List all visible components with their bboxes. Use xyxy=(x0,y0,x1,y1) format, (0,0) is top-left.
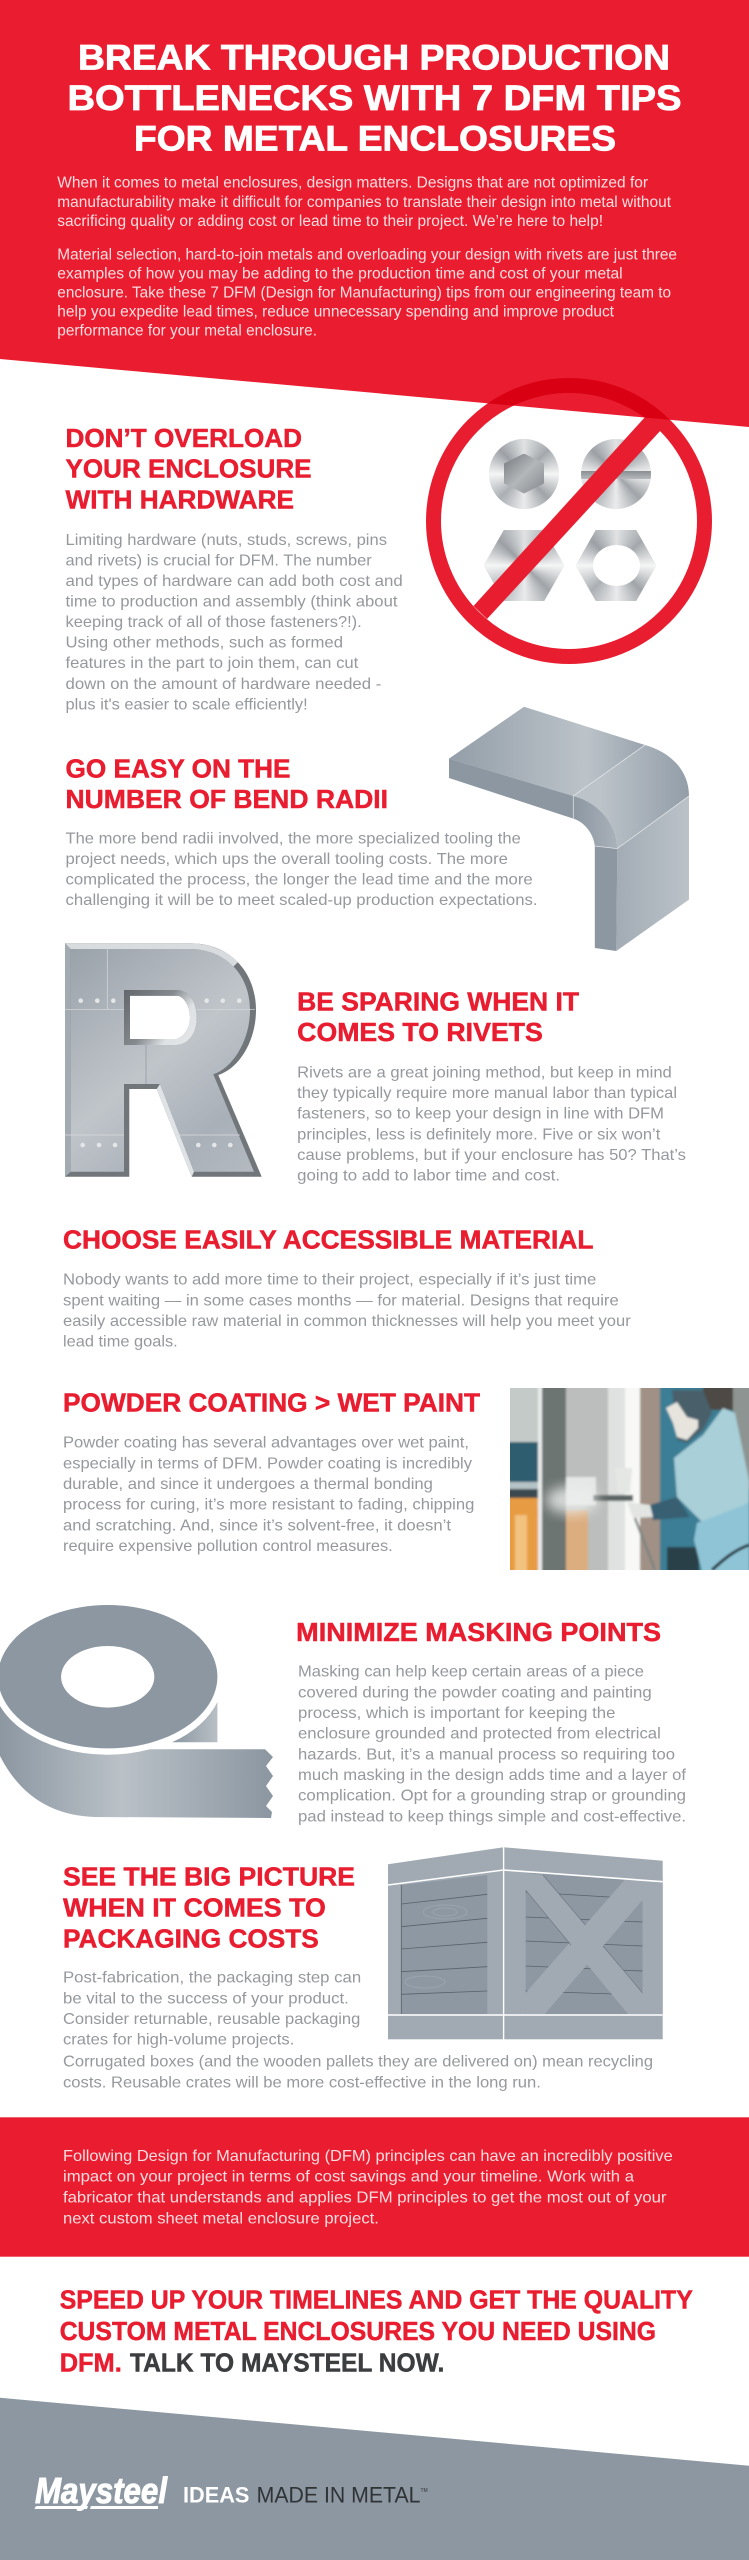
icon: bent sheet metal xyxy=(449,707,689,951)
title xyxy=(68,38,682,158)
heading: don't overload: WITH HARDWARE xyxy=(66,485,294,515)
icon: red no sign xyxy=(434,386,704,656)
heading: packaging: WHEN IT COMES TO xyxy=(63,1892,326,1922)
panel: tip 3 rivets xyxy=(65,943,686,1185)
body text: hardware: down on the amount of hardware needed - xyxy=(66,676,381,693)
intro paragraph 2: help you expedite lead times, reduce unnecessary spending and improve product xyxy=(57,304,615,321)
body text: material: Nobody wants to add more time to their project, especially if it’s just time xyxy=(63,1272,596,1289)
body text: powder coating: process for curing, it’s more resistant to fading, chipping xyxy=(63,1497,474,1514)
body text: packaging beside crate: crates for high-volume projects. xyxy=(63,2032,294,2049)
heading: rivets: COMES TO RIVETS xyxy=(297,1017,543,1047)
call to action: SPEED UP YOUR TIMELINES AND GET THE QUALITY xyxy=(60,2284,693,2314)
body text: bend radii xyxy=(66,831,538,909)
intro paragraph 2: enclosure. Take these 7 DFM (Design for Manufacturing) tips from our engineering team to xyxy=(57,285,671,302)
body text: powder coating: durable, and since it undergoes a thermal bonding xyxy=(63,1476,433,1493)
icon: prohibited hardware xyxy=(434,386,704,656)
body text: rivets: going to add to labor time and cost. xyxy=(297,1168,560,1185)
icon: hex nut xyxy=(576,530,656,601)
panel: tip 7 packaging xyxy=(63,1847,663,2091)
tagline xyxy=(183,2483,428,2508)
logo: Maysteel: Maysteel xyxy=(35,2470,168,2511)
body text: powder coating: Powder coating has several advantages over wet paint, xyxy=(63,1435,469,1452)
icon: metal letter R xyxy=(65,943,262,1177)
body text: masking: pad instead to keep things simple and cost-effective. xyxy=(298,1808,686,1825)
heading: bend radii: NUMBER OF BEND RADII xyxy=(66,784,388,814)
summary text xyxy=(63,2148,673,2227)
photo: worker powder coating xyxy=(510,1388,749,1570)
body text: bend radii: complicated the process, the longer the lead time and the more xyxy=(66,872,533,889)
panel: tip 5 powder coating xyxy=(63,1380,749,1580)
body text: powder coating: especially in terms of DFM. Powder coating is incredibly xyxy=(63,1455,472,1472)
call to action xyxy=(60,2284,693,2378)
body text: packaging beside crate: Consider returnable, reusable packaging xyxy=(63,2011,360,2028)
body text: material: lead time goals. xyxy=(63,1334,178,1351)
heading: masking: MINIMIZE MASKING POINTS xyxy=(296,1617,661,1647)
call to action: TALK TO MAYSTEEL NOW. xyxy=(130,2348,444,2378)
body text: packaging below crate: Corrugated boxes (and the wooden pallets they are delivered on) mean recycling xyxy=(63,2054,653,2071)
body text: packaging beside crate xyxy=(63,1970,361,2049)
body text: bend radii: challenging it will be to meet scaled-up production expectations. xyxy=(66,892,538,909)
heading: packaging: SEE THE BIG PICTURE xyxy=(63,1862,355,1892)
body text: rivets: Rivets are a great joining method, but keep in mind xyxy=(297,1064,672,1081)
body text: hardware: and rivets) is crucial for DFM. The number xyxy=(66,552,372,570)
panel: tip 6 masking xyxy=(0,1605,687,1825)
body text: material xyxy=(63,1272,631,1351)
summary text: fabricator that understands and applies DFM principles to get the most out of your xyxy=(63,2189,667,2206)
heading: don't overload: DON’T OVERLOAD xyxy=(66,423,302,453)
body text: masking: Masking can help keep certain areas of a piece xyxy=(298,1664,644,1681)
body text: hardware: Using other methods, such as formed xyxy=(66,635,343,652)
body text: packaging beside crate: Post-fabrication, the packaging step can xyxy=(63,1970,361,1987)
intro paragraph 1: manufacturability make it difficult for companies to translate their design into metal without xyxy=(57,194,672,211)
heading: bend radii: GO EASY ON THE xyxy=(66,754,290,784)
icon: slotted screw xyxy=(581,438,651,508)
body text: hardware: and types of hardware can add both cost and xyxy=(66,573,403,590)
body text: powder coating: and scratching. And, since it’s solvent-free, it doesn’t xyxy=(63,1517,452,1534)
body text: hardware xyxy=(66,532,403,713)
panel: tip 2 bend radii xyxy=(66,707,689,951)
heading: rivets: BE SPARING WHEN IT xyxy=(297,987,579,1017)
intro paragraph 1: sacrificing quality or adding cost or lead time to their project. We’re here to help! xyxy=(57,213,603,230)
body text: masking: complication. Opt for a grounding strap or grounding xyxy=(298,1788,686,1805)
body text: masking: hazards. But, it’s a manual process so requiring too xyxy=(298,1746,675,1763)
tagline: MADE IN METAL xyxy=(257,2483,420,2508)
body text: bend radii: project needs, which ups the overall tooling costs. The more xyxy=(66,851,508,868)
title: BREAK THROUGH PRODUCTION xyxy=(78,38,670,78)
body text: material: easily accessible raw material in common thicknesses will help you meet your xyxy=(63,1313,631,1330)
body text: rivets: they typically require more manual labor than typical xyxy=(297,1085,677,1102)
body text: masking xyxy=(298,1664,687,1825)
body text: hardware: plus it's easier to scale efficiently! xyxy=(66,696,308,713)
body text: masking: covered during the powder coating and painting xyxy=(298,1684,652,1701)
panel: gray footer xyxy=(0,2398,749,2560)
tagline: TM xyxy=(420,2488,428,2494)
body text: hardware: keeping track of all of those fasteners?!). xyxy=(66,614,362,631)
heading: bend radii xyxy=(66,754,388,814)
intro paragraph 2: Material selection, hard-to-join metals and overloading your design with rivets are just three xyxy=(57,246,677,263)
body text: packaging beside crate: be vital to the success of your product. xyxy=(63,1990,349,2007)
body text: powder coating xyxy=(63,1435,474,1555)
body text: hardware: time to production and assembly (think about xyxy=(66,594,398,610)
title: FOR METAL ENCLOSURES xyxy=(134,118,616,158)
body text: rivets: cause problems, but if your enclosure has 50? That’s xyxy=(297,1147,686,1164)
body text: masking: enclosure grounded and protected from electrical xyxy=(298,1726,661,1743)
body text: bend radii: The more bend radii involved, the more specialized tooling the xyxy=(66,831,521,848)
body text: packaging below crate: costs. Reusable crates will be more cost-effective in the long run. xyxy=(63,2074,541,2091)
panel: tip 4 material xyxy=(63,1224,631,1351)
call to action: CUSTOM METAL ENCLOSURES YOU NEED USING xyxy=(60,2316,656,2346)
heading: packaging: PACKAGING COSTS xyxy=(63,1923,319,1953)
body text: hardware: Limiting hardware (nuts, studs, screws, pins xyxy=(66,532,387,549)
intro paragraph 1 xyxy=(57,175,672,230)
intro paragraph 2 xyxy=(57,246,677,340)
heading: don't overload xyxy=(66,423,312,515)
summary text: Following Design for Manufacturing (DFM) principles can have an incredibly positive xyxy=(63,2148,673,2165)
panel: red header banner xyxy=(0,0,749,427)
icon: roll of masking tape xyxy=(0,1605,273,1818)
title: BOTTLENECKS WITH 7 DFM TIPS xyxy=(68,78,682,118)
heading: don't overload: YOUR ENCLOSURE xyxy=(66,454,312,484)
body text: powder coating: require expensive pollution control measures. xyxy=(63,1538,393,1555)
intro paragraph 2: examples of how you may be adding to the production time and cost of your metal xyxy=(57,266,623,283)
body text: material: spent waiting — in some cases months — for material. Designs that require xyxy=(63,1292,619,1309)
heading: powder coating: POWDER COATING > WET PAINT xyxy=(63,1388,480,1418)
body text: hardware: features in the part to join them, can cut xyxy=(66,655,359,672)
summary text: next custom sheet metal enclosure project. xyxy=(63,2210,379,2227)
tagline: IDEAS xyxy=(183,2483,249,2508)
call to action: DFM. xyxy=(60,2348,122,2378)
body text: rivets: fasteners, so to keep your design in line with DFM xyxy=(297,1106,664,1123)
intro paragraph 2: performance for your metal enclosure. xyxy=(57,323,317,340)
summary text: impact on your project in terms of cost savings and your timeline. Work with a xyxy=(63,2169,634,2186)
heading: rivets xyxy=(297,987,579,1047)
icon: hex socket bolt xyxy=(489,438,559,508)
intro paragraph 1: When it comes to metal enclosures, design matters. Designs that are not optimized for xyxy=(57,175,648,192)
body text: masking: much masking in the design adds time and a layer of xyxy=(298,1767,687,1784)
heading: material: CHOOSE EASILY ACCESSIBLE MATERIAL xyxy=(63,1224,594,1254)
icon: wooden crate xyxy=(388,1847,663,2040)
body text: masking: process, which is important for keeping the xyxy=(298,1705,615,1722)
body text: packaging below crate xyxy=(63,2054,653,2091)
icon: hex bolt xyxy=(484,530,564,601)
panel: tip 1 hardware xyxy=(66,386,704,713)
heading: packaging xyxy=(63,1862,355,1953)
panel: red summary band xyxy=(0,2117,749,2257)
body text: rivets xyxy=(297,1064,686,1185)
body text: rivets: principles, less is definitely more. Five or six won’t xyxy=(297,1126,661,1143)
